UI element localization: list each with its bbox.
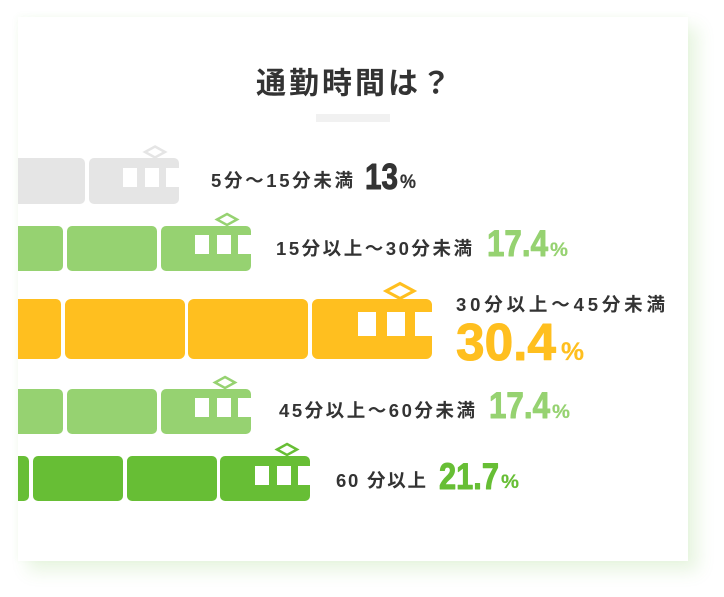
value: 21.7%: 21.7 [439,456,499,497]
value: 30.4%: % [561,338,584,366]
value: 21.7%: % [501,472,519,493]
label: 5-15 minutes: 5分～15分未満 [211,170,353,191]
label: 15-30 minutes: 15分以上～30分未満 [276,238,472,259]
train: 30-45 minutes [18,284,432,359]
label: 30-45 minutes: 30分以上～45分未満 [456,294,665,315]
label: 60+ minutes: 60 分以上 [336,470,426,491]
label: 45-60 minutes: 45分以上～60分未満 [279,400,475,421]
title underline [316,114,390,122]
value: 17.4%: % [550,240,568,261]
title: 通勤時間は？ [256,68,451,100]
value: 17.4%: 17.4 [487,223,548,264]
train: 15-30 minutes [18,214,251,271]
value: 17.4%: % [552,402,570,423]
value: 13%: % [400,172,416,193]
train: 45-60 minutes [18,377,251,434]
value: 17.4%: 17.4 [489,385,550,426]
train: 5-15 minutes [18,146,179,204]
train: 60+ minutes [18,444,310,501]
value: 30.4%: 30.4 [456,314,556,372]
value: 13%: 13 [365,156,398,197]
